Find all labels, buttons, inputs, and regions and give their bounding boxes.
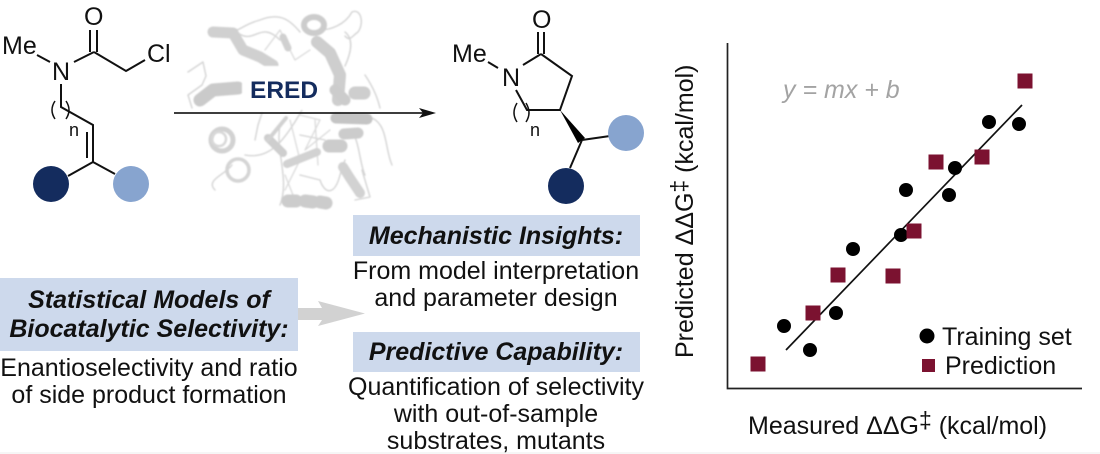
training set points	[777, 115, 1026, 357]
subscript n: n	[530, 120, 540, 140]
atom label: O: O	[84, 3, 103, 31]
atom label: Me: Me	[2, 32, 37, 60]
y axis label: ‡	[666, 180, 692, 193]
description: Enantioselectivity and ratio	[0, 354, 298, 382]
heading: Mechanistic Insights:	[369, 222, 623, 250]
molecule: substrate	[2, 3, 171, 202]
arrow: gray block arrow	[298, 301, 365, 326]
substituent: light blue circle	[608, 115, 644, 151]
description: Quantification of selectivity	[348, 373, 644, 401]
reaction arrow	[174, 108, 436, 118]
atom label: N: N	[52, 58, 70, 86]
subscript n: n	[69, 120, 79, 140]
scatter chart	[666, 43, 1082, 440]
legend label: training set: Training set	[942, 323, 1072, 351]
heading box	[0, 278, 298, 351]
panel: statistical models	[0, 278, 298, 409]
prediction points	[750, 74, 1032, 372]
y axis label: Predicted ΔΔG	[671, 193, 699, 358]
y axis label: (kcal/mol)	[671, 64, 699, 180]
panel: mechanistic insights	[353, 215, 640, 312]
heading box	[353, 332, 640, 372]
bonds	[37, 30, 145, 176]
substituent: dark blue circle	[33, 166, 69, 202]
panel: predictive capability	[348, 332, 644, 454]
substituent: dark blue circle	[548, 168, 584, 204]
description line 2: with out-of-sample	[393, 400, 598, 428]
heading: Statistical Models of	[28, 286, 273, 314]
heading line 2: Biocatalytic Selectivity:	[9, 315, 289, 343]
legend marker: training set	[920, 328, 934, 344]
legend label: prediction: Prediction	[945, 352, 1056, 380]
x axis label: (kcal/mol)	[932, 412, 1047, 440]
x axis label: ‡	[919, 407, 932, 433]
description line 2: of side product formation	[11, 381, 287, 409]
atom label: N: N	[502, 64, 520, 92]
legend	[920, 323, 1072, 380]
substituent: light blue circle	[113, 166, 149, 202]
legend marker: prediction	[922, 359, 935, 372]
axes	[728, 43, 1082, 388]
label: ERED: ERED	[250, 77, 318, 104]
description: From model interpretation	[353, 257, 639, 285]
repeat-unit parentheses	[52, 101, 69, 119]
x axis label: Measured ΔΔG	[748, 412, 919, 440]
equation: y = mx + b	[781, 76, 900, 104]
heading: Predictive Capability:	[369, 338, 623, 366]
stereo wedge bond	[560, 110, 585, 143]
description line 2: and parameter design	[374, 284, 618, 312]
atom label: O: O	[532, 6, 551, 34]
repeat-unit parentheses	[514, 103, 529, 122]
atom label: Cl: Cl	[147, 40, 171, 68]
heading box	[353, 215, 640, 256]
fit line	[786, 105, 1022, 350]
icon: ERED enzyme ribbon structure	[188, 11, 392, 205]
molecule: product	[452, 6, 644, 204]
atom label: Me: Me	[452, 40, 487, 68]
bonds	[488, 32, 610, 168]
